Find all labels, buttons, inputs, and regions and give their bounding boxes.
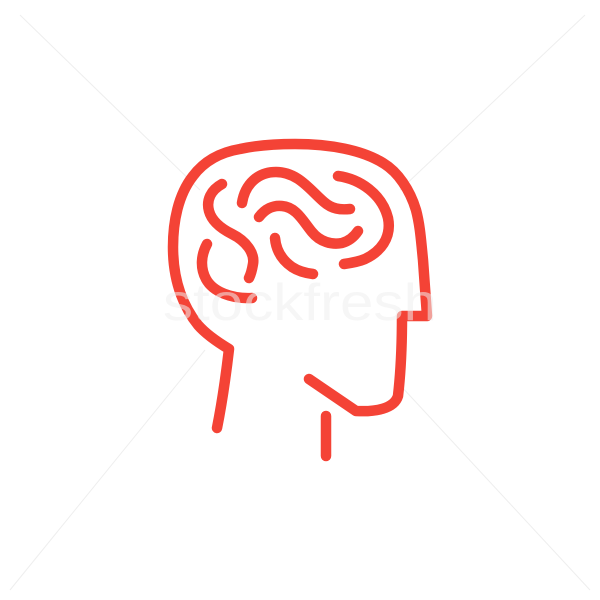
brain fold: left lower xyxy=(202,244,252,298)
brain fold: left upper xyxy=(208,184,253,278)
brain fold: top wave xyxy=(242,172,350,209)
brain fold: lower arc xyxy=(275,238,313,274)
icon: brain folds xyxy=(202,172,389,298)
brain fold: middle wave xyxy=(259,206,358,244)
watermark: stockfresh xyxy=(163,274,437,332)
brain fold: right arc xyxy=(338,176,389,264)
icon: head outline xyxy=(173,144,427,428)
icon: neck front line xyxy=(321,416,331,456)
